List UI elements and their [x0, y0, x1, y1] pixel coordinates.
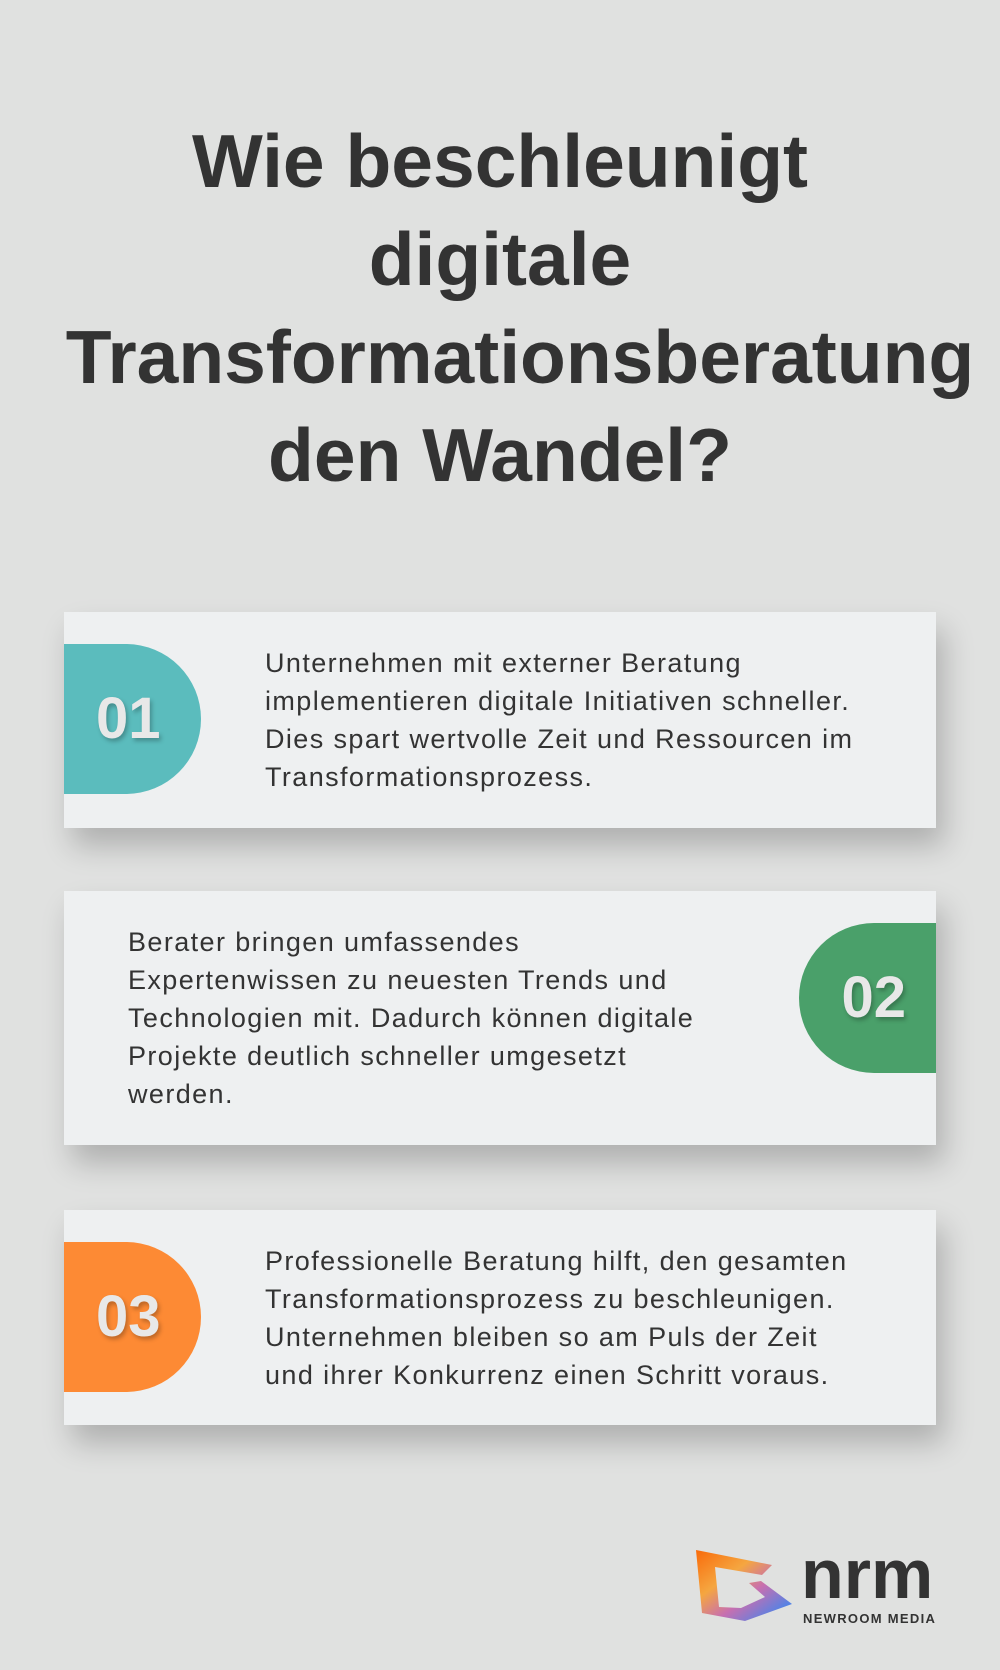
title: den Wandel? — [268, 413, 732, 497]
text 03: Transformationsprozess zu beschleunigen. — [265, 1284, 835, 1314]
badge 03: 03 — [96, 1284, 161, 1349]
text 02: Expertenwissen zu neuesten Trends und — [128, 965, 668, 995]
badge 02 — [799, 923, 936, 1073]
title: Wie beschleunigt — [192, 119, 808, 203]
text 02: Projekte deutlich schneller umgesetzt — [128, 1041, 627, 1071]
text 03: und ihrer Konkurrenz einen Schritt voraus. — [265, 1360, 830, 1390]
text 03: Professionelle Beratung hilft, den gesamten — [265, 1246, 848, 1276]
text 02: werden. — [128, 1079, 234, 1109]
logo text: nrm — [801, 1535, 933, 1613]
text 03 — [265, 1246, 848, 1390]
panel: card 03 — [64, 1210, 936, 1425]
badge 01 — [64, 644, 201, 794]
panel: card 02 — [64, 891, 936, 1145]
panel: card 01 — [64, 612, 936, 828]
text 01: Unternehmen mit externer Beratung — [265, 648, 742, 678]
badge 03 — [64, 1242, 201, 1392]
text 02: Technologien mit. Dadurch können digitale — [128, 1003, 694, 1033]
text 01: implementieren digitale Initiativen schneller. — [265, 686, 850, 716]
badge 02: 02 — [841, 965, 906, 1030]
logo: NEWROOM MEDIA — [803, 1611, 936, 1626]
icon: logo mark — [696, 1550, 792, 1621]
logo — [696, 1535, 936, 1626]
text 02: Berater bringen umfassendes — [128, 927, 520, 957]
title — [66, 119, 974, 497]
title: digitale — [369, 217, 631, 301]
text 02 — [128, 927, 694, 1109]
text 01: Transformationsprozess. — [265, 762, 593, 792]
title: Transformationsberatung — [66, 315, 974, 399]
text 01: Dies spart wertvolle Zeit und Ressourcen im — [265, 724, 853, 754]
text 01 — [265, 648, 853, 792]
text 03: Unternehmen bleiben so am Puls der Zeit — [265, 1322, 818, 1352]
badge 01: 01 — [96, 686, 161, 751]
